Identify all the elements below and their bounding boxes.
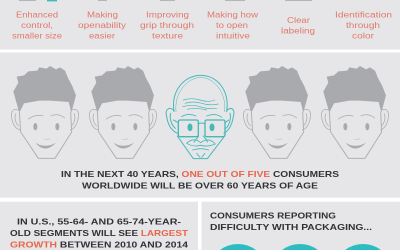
text: growth statement [10,217,189,249]
heading: consumers reporting difficulty: DIFFICULTY WITH PACKAGING... [210,222,372,232]
caption: making openability easier: easier [89,32,115,41]
caption: making how to open intuitive: Making how [207,11,258,20]
caption: improving grip: Improving [146,11,189,20]
panel: largest growth [0,202,198,250]
caption: identification through color: Identification [335,11,392,20]
text: growth statement: OLD SEGMENTS WILL SEE LARGEST [10,228,189,238]
caption: clear labeling: labeling [281,26,315,35]
heading: consumers reporting difficulty: CONSUMERS REPORTING [210,211,336,221]
caption: making openability easier: Making [87,11,118,20]
circle 2 [282,244,318,250]
caption: identification through color [335,11,392,41]
caption: making how to open intuitive: to open [216,21,248,30]
circle 1 [220,244,256,250]
caption: clear labeling [281,16,315,35]
panel: aging population [0,52,400,198]
caption: identification through color: through [346,21,380,30]
caption: improving grip: texture [152,32,184,41]
headline: one out of five: IN THE NEXT 40 YEARS, ONE OUT OF FIVE CONSUMERS [61,169,339,179]
caption: clear labeling: Clear [287,16,310,25]
icon: young face 2 [89,66,157,158]
panel: packaging benefits [0,0,400,50]
caption: enhanced control: smaller size [12,32,63,41]
heading: consumers reporting difficulty [210,211,372,232]
icon: young face 4 [243,66,311,158]
caption: identification through color: color [352,32,374,41]
icon remnants: cropped package icons [19,0,312,1]
caption: enhanced control [12,11,63,41]
caption: making how to open intuitive: intuitive [216,32,251,41]
text: growth statement: GROWTH BETWEEN 2010 AND 2014 [10,239,188,249]
caption: improving grip [140,11,194,41]
caption: enhanced control: control, [21,21,53,30]
caption: making openability easier [78,11,126,41]
text: growth statement: IN U.S., 55-64- AND 65-74-YEAR- [17,217,181,227]
icon: young face 1 [11,66,79,158]
icon: old face with glasses [166,75,234,159]
caption: improving grip: grip through [140,21,194,30]
caption: enhanced control: Enhanced [16,11,58,20]
icon: young face 5 [321,66,389,158]
caption: making openability easier: openability [78,21,126,30]
panel: packaging difficulty [202,202,400,250]
headline: one out of five: WORLDWIDE WILL BE OVER 60 YEARS OF AGE [82,181,318,191]
headline: one out of five [61,169,339,191]
caption: making how to open intuitive [207,11,258,41]
circle 3 [345,244,381,250]
